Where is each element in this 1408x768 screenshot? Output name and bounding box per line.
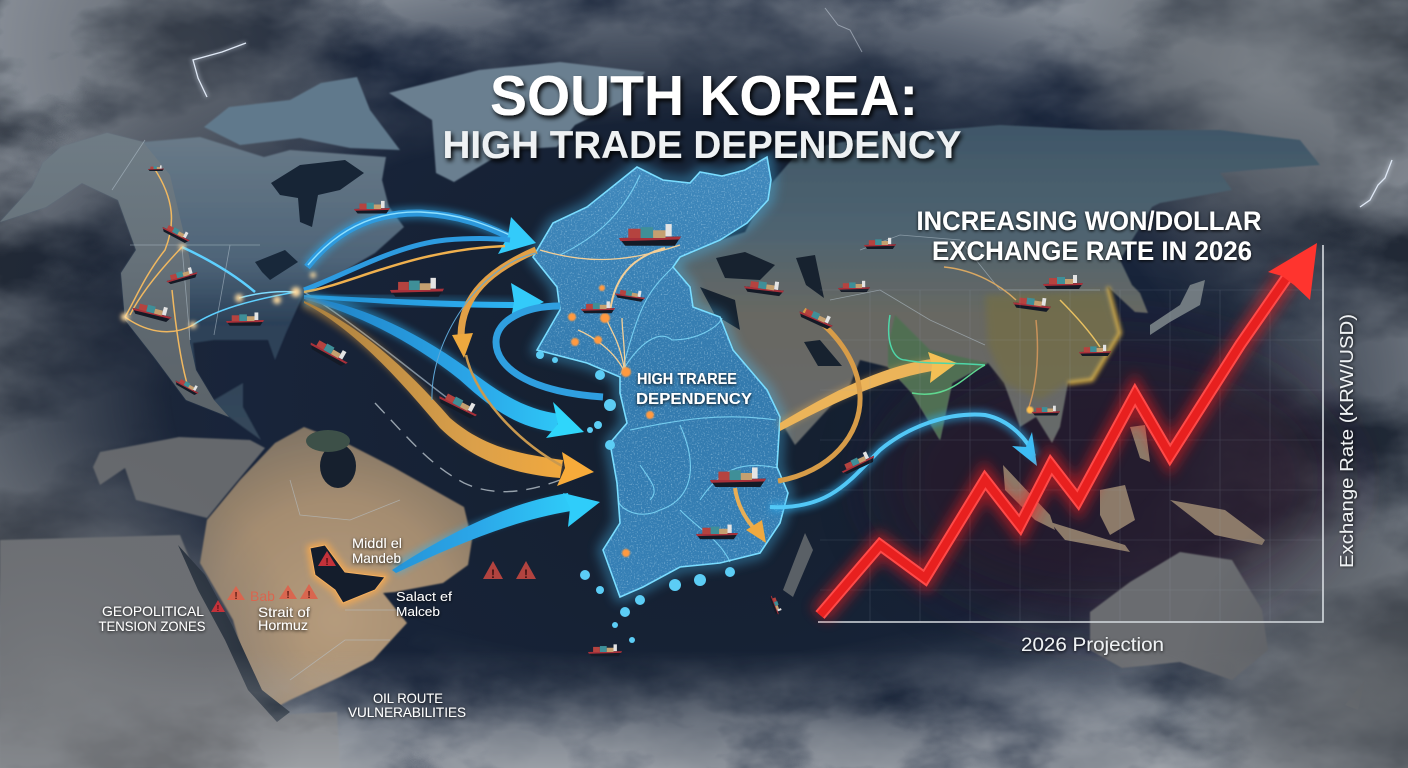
land: Gulf <box>804 340 842 366</box>
blue arrow: long route over the Atlantic <box>307 212 536 267</box>
blue arrow: to Korean west coast <box>304 283 544 318</box>
label: salact malceb: Salact ef <box>396 589 452 604</box>
label: middle mandeb: Mandeb <box>352 550 401 566</box>
blue arrow: return hook <box>496 306 603 397</box>
land: Black Sea <box>716 252 775 280</box>
land: Greenland <box>389 62 645 182</box>
spark: Southeast Asia <box>1026 406 1034 414</box>
Korea: gold trade sparks <box>540 245 680 373</box>
land: Madagascar <box>783 533 813 597</box>
land: North America <box>0 133 404 440</box>
label: geopolitical tension zones: TENSION ZONES <box>98 618 206 634</box>
warning triangle: ! <box>234 591 238 602</box>
land: inland sea <box>320 444 356 488</box>
lightning: right <box>1360 160 1392 207</box>
land: lower left Africa <box>0 535 340 768</box>
land: Mediterranean edge <box>700 287 740 330</box>
title line 1: SOUTH KOREA: <box>490 64 918 128</box>
land: China warm tint <box>985 290 1120 400</box>
chart grid <box>820 290 1323 622</box>
land: Arabian peninsula and Iran <box>200 427 472 707</box>
warning triangle: ! <box>325 557 329 568</box>
blue arrow: Korea to Southeast Asia <box>770 415 1037 507</box>
lightning: top centre <box>825 8 862 52</box>
red trend line core <box>820 270 1292 615</box>
title line 2: HIGH TRADE DEPENDENCY <box>442 124 962 167</box>
label: high trade dependency <box>636 371 752 408</box>
South Korea glowing map <box>530 155 792 643</box>
warning triangle <box>227 586 245 602</box>
cloud: bottom right <box>1175 480 1408 768</box>
red trend arrowhead <box>1268 243 1317 300</box>
container ships <box>131 165 1111 656</box>
cloud: bottom left <box>0 430 310 768</box>
label: oil route vulnerabilities: VULNERABILITIES <box>348 704 466 720</box>
y axis label: Exchange Rate (KRW/USD) <box>1337 314 1357 568</box>
land: western North America tint <box>0 133 229 417</box>
label: high trade dependency: DEPENDENCY <box>636 391 752 408</box>
Korea: internal borders <box>560 175 778 562</box>
chart tint <box>880 340 1340 620</box>
label: middle mandeb: Middl el <box>352 535 402 551</box>
land: Japan <box>1150 280 1205 335</box>
Korea: fill and border <box>533 157 788 597</box>
label: salact malceb <box>396 589 452 619</box>
label: high trade dependency: HIGH TRAREE <box>637 371 737 388</box>
red trend line glow <box>820 270 1292 615</box>
warning triangle: ! <box>286 590 290 601</box>
land: Hudson Bay <box>271 160 364 227</box>
label: bab: Bab <box>250 588 275 604</box>
land: Eurasia <box>673 125 1320 445</box>
warning triangle <box>211 600 225 613</box>
warning triangle: ! <box>307 590 311 601</box>
label: oil route vulnerabilities <box>348 690 466 720</box>
label: strait of hormuz: Strait of <box>258 604 310 620</box>
blue arrow: second route into same head <box>304 238 510 290</box>
warning triangle <box>300 584 318 601</box>
label: strait of hormuz <box>258 604 310 633</box>
red trend line edge <box>820 270 1292 615</box>
gold arrow: sweep to Korea <box>304 301 594 486</box>
land: Indonesia islands <box>1003 425 1265 552</box>
blue thin route <box>432 253 536 400</box>
label: strait of hormuz: Hormuz <box>258 617 308 633</box>
warning triangle: ! <box>217 604 219 613</box>
tension zone warning icons <box>211 551 536 613</box>
chart heading: EXCHANGE RATE IN 2026 <box>932 236 1252 266</box>
land: Persian Gulf glow <box>310 545 385 603</box>
cloud: top right bright <box>1030 0 1408 290</box>
foreground clouds along the bottom <box>0 469 1408 768</box>
title <box>442 64 962 167</box>
x axis label: 2026 Projection <box>1021 635 1164 656</box>
warning triangle: ! <box>491 567 495 581</box>
gold route: under blue route <box>304 246 505 292</box>
land: Persian Gulf water <box>310 545 385 603</box>
thin routes: Asia <box>889 267 1100 410</box>
chart heading <box>916 206 1262 266</box>
Korea: coastal islands <box>536 351 735 643</box>
chart heading: INCREASING WON/DOLLAR <box>916 206 1262 236</box>
Korea: outer glow <box>533 157 788 597</box>
land: Arctic islands <box>204 77 400 150</box>
warning triangle <box>516 561 536 581</box>
trade route arrows <box>121 168 1100 573</box>
label: oil route vulnerabilities: OIL ROUTE <box>373 690 443 706</box>
label: geopolitical tension zones: GEOPOLITICAL <box>102 603 204 619</box>
land: borders <box>112 140 1100 680</box>
chart axes <box>818 245 1323 622</box>
land: Australia <box>1090 552 1268 680</box>
lightning bolts <box>193 8 1392 207</box>
gold thin route continuing from hook <box>466 355 562 466</box>
Korea: speckle texture <box>530 155 792 600</box>
gold arrow: return loop <box>778 310 860 481</box>
blue arrow: sweep to mid Korea <box>304 297 584 438</box>
label: geopolitical tension zones <box>98 603 206 634</box>
land: Great Lakes <box>255 250 298 280</box>
land: China coast glow <box>1068 287 1120 383</box>
cloud: top left <box>0 0 400 260</box>
gold arrow: Korea to India <box>780 352 957 431</box>
lightning: top left <box>193 43 246 97</box>
blue arrow: Middle East to Korea <box>392 493 600 573</box>
warning triangle <box>318 551 336 568</box>
thin routes: North America hub <box>125 168 450 400</box>
dashed sea route <box>375 403 560 492</box>
hub glows <box>121 244 316 328</box>
gold arrow: within southern Korea <box>735 488 766 543</box>
warning triangle <box>279 585 297 601</box>
land: green highlands <box>306 430 350 452</box>
land: Caspian Sea <box>796 255 824 298</box>
land: South America band <box>93 437 265 518</box>
gold arrow: hook down <box>452 250 536 358</box>
warning triangle: ! <box>524 567 528 581</box>
warning triangle <box>483 561 503 581</box>
label: salact malceb: Malceb <box>396 604 440 619</box>
label: middle mandeb <box>352 535 402 566</box>
land: New Zealand <box>1345 680 1365 710</box>
land: Red Sea <box>178 545 290 722</box>
land: India green tint <box>888 315 988 440</box>
chart: exchange rate projection <box>818 243 1323 622</box>
